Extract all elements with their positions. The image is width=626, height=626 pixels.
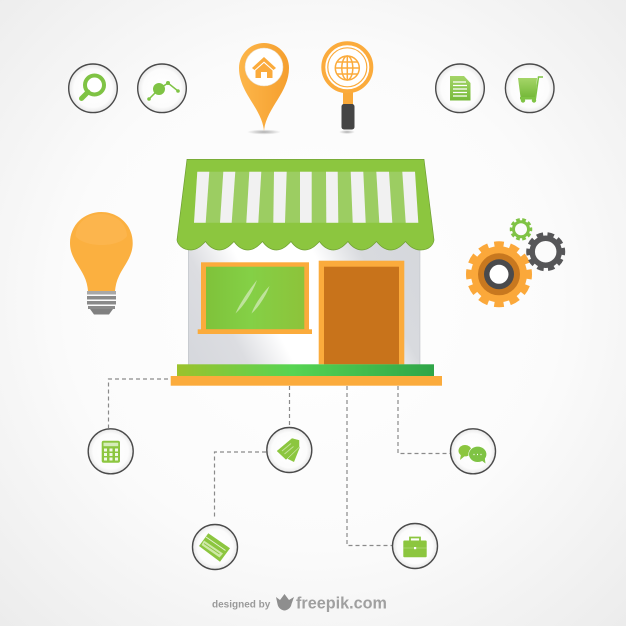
icon: credit card badge [192,524,238,570]
large orange gear [470,245,528,303]
icon: freepik crown [276,594,294,610]
connector: chat to shop [398,386,450,454]
icon: document badge [436,64,484,113]
icon: map pin with house [239,43,289,134]
connector: calculator to shop [108,379,168,428]
connector: tag to shop [288,386,290,428]
icon: magnifier with globe [323,43,371,134]
shop building [171,159,442,386]
awning light band [194,172,418,223]
icon: price tag badge [267,428,312,472]
green base [177,364,434,376]
icon: chat badge [450,429,496,474]
footer credit [212,594,387,612]
awning [177,159,434,250]
icon: network badge [138,64,186,113]
icon: search badge [69,64,117,113]
wall [188,238,420,365]
icon: calculator badge [88,429,133,474]
icon: gears [470,219,563,303]
gray gear [528,234,563,269]
door [319,261,404,364]
footer credit: freepik.com [296,594,387,612]
orange step [171,376,442,386]
connector: briefcase to shop [347,386,392,546]
icon: light bulb [70,212,133,314]
icon: briefcase badge [392,524,438,568]
icon: cart badge [505,64,554,113]
awning white stripes [194,172,418,223]
footer credit: designed by [212,600,271,610]
connector: card to tag [214,452,266,518]
window [198,262,312,334]
green gear [511,219,531,239]
